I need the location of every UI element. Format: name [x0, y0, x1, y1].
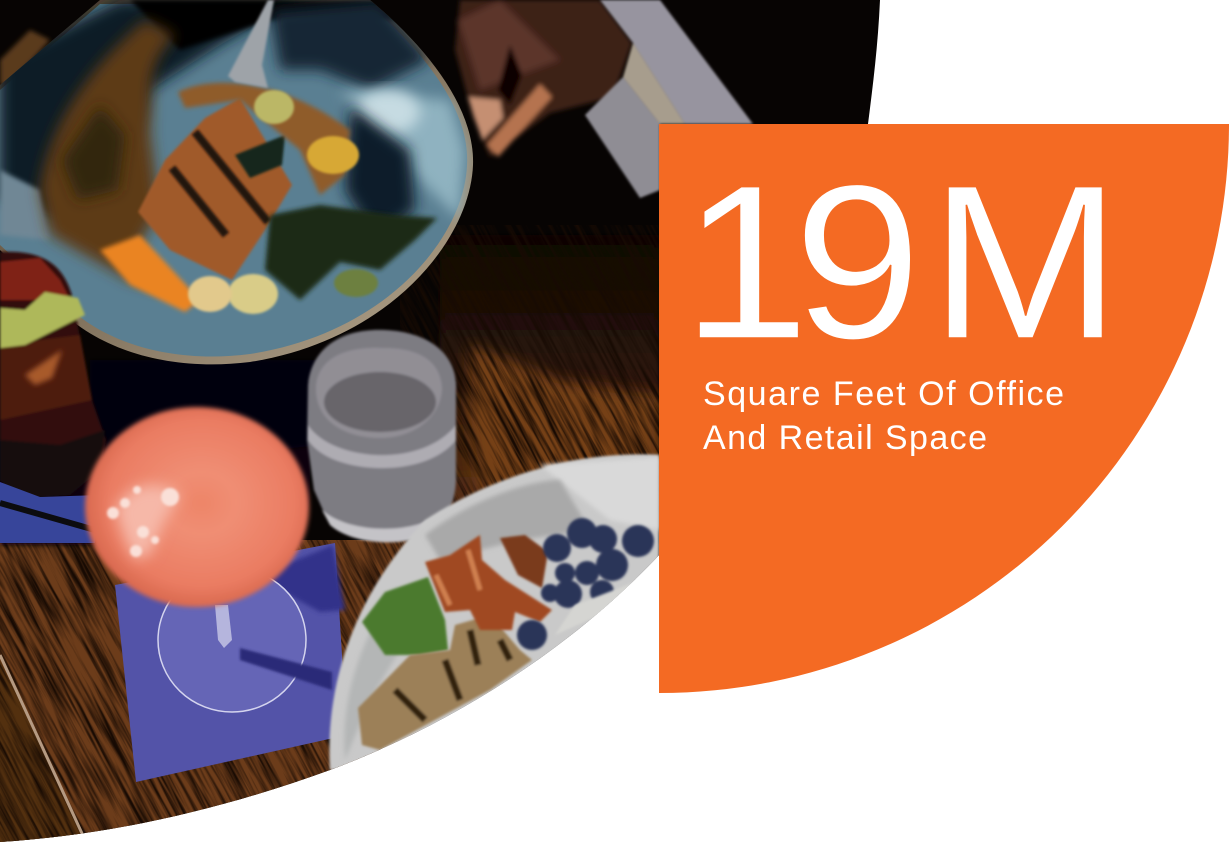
white folded napkin: [585, 0, 753, 198]
blue plate with salmon: [0, 0, 473, 364]
description text: [703, 375, 1064, 457]
panel: food photograph clipped by curve: [0, 0, 880, 842]
black straw: [0, 500, 92, 532]
description text: And Retail Space: [703, 419, 987, 457]
water glass: [307, 330, 456, 542]
plate shadow: [0, 0, 294, 220]
bacon: [425, 535, 552, 630]
pink cocktail with stem and base: [0, 407, 332, 712]
herbs and garnish: [265, 205, 437, 300]
grilled chicken: [358, 615, 532, 750]
blue napkin left: [0, 482, 100, 543]
description text: Square Feet Of Office: [703, 375, 1064, 413]
bowl with salad: [329, 454, 659, 770]
panel: orange quarter circle: [659, 124, 1229, 693]
purple napkin: [115, 543, 347, 782]
red drink glass: [0, 252, 106, 498]
lettuce: [362, 577, 448, 655]
hand: [455, 0, 632, 157]
salmon fillet: [138, 98, 292, 280]
wood table background: [0, 0, 880, 842]
blueberries: [517, 518, 654, 650]
sauce smear: [40, 20, 175, 290]
headline number: 19M: [681, 139, 1121, 385]
glass base: [158, 568, 306, 712]
